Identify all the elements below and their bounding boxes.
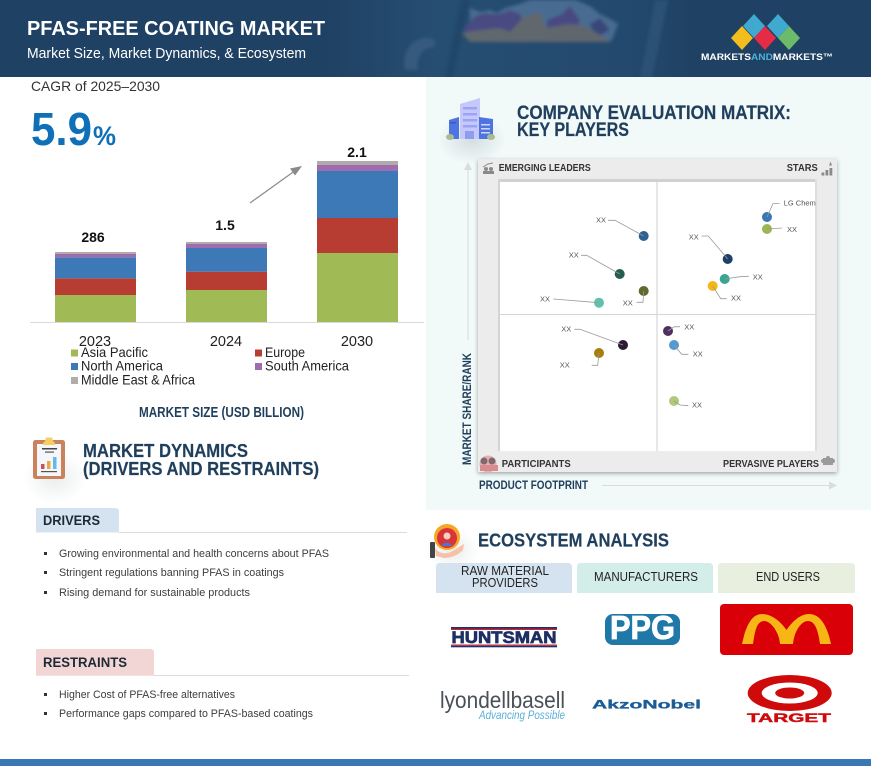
marker: olive green: [762, 224, 797, 234]
CAGR label: CAGR of 2025–2030: [31, 78, 160, 94]
marker: near black: [561, 325, 628, 350]
y axis arrow: [464, 162, 472, 340]
icon: clipboard: [23, 438, 87, 504]
subtitle: Market Size, Market Dynamics, & Ecosystem: [27, 46, 306, 62]
marker: purple: XX: [684, 323, 694, 332]
value labels: 1.5: [215, 217, 235, 233]
column header: end users: END USERS: [756, 570, 820, 584]
icon: emerging leaders: [483, 163, 494, 174]
legend: Asia Pacific: [81, 344, 148, 360]
x axis label: PRODUCT FOOTPRINT: [479, 480, 588, 492]
logo: MarketsandMarkets: MARKETS ANDMARKETS™: [701, 52, 833, 63]
heading: MARKET DYNAMICS: [83, 440, 248, 461]
icon: pervasive players: [821, 456, 835, 465]
column header: end users: [718, 563, 855, 593]
year labels: 2024: [210, 334, 242, 350]
heading: ECOSYSTEM ANALYSIS: [478, 530, 669, 550]
panel: evaluation matrix background: [426, 77, 871, 510]
drivers list: [44, 548, 329, 599]
marker: teal: XX: [753, 273, 763, 282]
legend: North America: [81, 358, 163, 374]
restraints list: Higher Cost of PFAS-free alternatives: [59, 689, 235, 701]
restraints list: [44, 689, 313, 720]
logo: LyondellBasell: [440, 687, 565, 722]
column header: raw material providers: PROVIDERS: [472, 576, 538, 590]
icon: hand holding person: [424, 524, 480, 572]
column header: manufacturers: MANUFACTURERS: [594, 570, 698, 584]
axis caption: MARKET SIZE (USD BILLION): [139, 405, 304, 421]
x axis arrow: [602, 482, 837, 490]
icon: participants: [480, 456, 498, 472]
marker: light blue: [669, 340, 703, 359]
quadrant labels: PARTICIPANTS: [502, 458, 571, 470]
icon: buildings: [438, 98, 506, 164]
heading: company evaluation matrix: COMPANY EVALUATION MATRIX:: [517, 103, 791, 124]
drivers tab: DRIVERS: [43, 513, 100, 528]
company markers: [540, 199, 816, 410]
legend: Europe: [265, 344, 305, 360]
legend: South America: [265, 358, 349, 374]
bar chart: market size: [30, 144, 424, 421]
marker: yellow: XX: [731, 294, 741, 303]
column header: raw material providers: RAW MATERIAL: [461, 564, 549, 578]
logo: AkzoNobel: AkzoNobel: [592, 698, 701, 712]
legend: Middle East & Africa: [81, 372, 195, 388]
marker: olive green: XX: [787, 225, 797, 234]
marker: dark teal: XX: [569, 251, 579, 260]
chart: company evaluation matrix: [460, 159, 837, 492]
header banner: [0, 0, 871, 78]
title: PFAS-FREE COATING MARKET: [27, 18, 325, 40]
year labels: [79, 334, 373, 350]
legend: [71, 344, 349, 388]
marker: LG Chem: LG Chem: [784, 199, 816, 208]
quadrant labels: PERVASIVE PLAYERS: [723, 458, 819, 470]
logo: Target: [747, 675, 832, 725]
quadrant labels: EMERGING LEADERS: [499, 162, 591, 174]
marker: mint: [540, 295, 604, 308]
CAGR value: %: [93, 121, 116, 151]
marker: blue: [596, 216, 649, 241]
icon: stars: [822, 162, 832, 176]
bar 2024: [186, 242, 267, 322]
marker: LG Chem: [762, 199, 816, 222]
marker: dark olive: [623, 286, 649, 308]
footer bar: [0, 759, 871, 766]
logo: LyondellBasell: Advancing Possible: [478, 708, 565, 722]
bar 2023: [55, 252, 136, 322]
panel: market dynamics: [23, 438, 409, 720]
heading: (DRIVERS AND RESTRAINTS): [83, 458, 319, 479]
matrix plot area: [498, 179, 817, 451]
marker: brown: XX: [560, 361, 570, 370]
drivers list: Stringent regulations banning PFAS in coatings: [59, 567, 284, 579]
logo: Huntsman: HUNTSMAN: [452, 629, 556, 647]
marker: purple: [663, 323, 694, 336]
marker: navy: XX: [689, 233, 699, 242]
logo: PPG: PPG: [610, 609, 675, 646]
value labels: 2.1: [347, 144, 367, 160]
CAGR value: 5.9: [31, 103, 92, 155]
drivers list: Rising demand for sustainable products: [59, 587, 250, 599]
logo: MarketsandMarkets: [701, 14, 833, 63]
year labels: 2030: [341, 334, 373, 350]
drivers list: Growing environmental and health concerns about PFAS: [59, 548, 329, 560]
marker: lime: XX: [692, 401, 702, 410]
value labels: 286: [81, 229, 105, 245]
column header: manufacturers: [577, 563, 713, 593]
y axis label: MARKET SHARE/RANK: [460, 353, 474, 465]
growth arrow: [250, 166, 302, 203]
marker: navy: [689, 233, 733, 264]
marker: blue: XX: [596, 216, 606, 225]
year labels: 2023: [79, 334, 111, 350]
marker: mint: XX: [540, 295, 550, 304]
column header: raw material providers: [436, 563, 572, 593]
bar 2030: [317, 161, 398, 322]
marker: yellow: [708, 281, 741, 303]
quadrant labels: [499, 162, 819, 470]
marker: dark teal: [569, 251, 625, 279]
logo: McDonald's: [720, 604, 853, 655]
heading: company evaluation matrix: [517, 103, 791, 141]
restraints tab: RESTRAINTS: [43, 655, 127, 670]
marker: light blue: XX: [693, 350, 703, 359]
heading: company evaluation matrix: KEY PLAYERS: [517, 120, 629, 141]
marker: teal: [720, 273, 763, 284]
restraints tab: [36, 649, 409, 676]
marker: lime: [669, 396, 702, 410]
restraints list: Performance gaps compared to PFAS-based coatings: [59, 708, 313, 720]
marker: dark olive: XX: [623, 299, 633, 308]
drivers tab: [36, 508, 407, 532]
matrix frame: [478, 159, 837, 472]
marker: near black: XX: [561, 325, 571, 334]
marker: brown: [560, 348, 604, 370]
logo: Target: TARGET: [747, 713, 831, 725]
logo: LyondellBasell: lyondellbasell: [440, 687, 565, 713]
value labels: [81, 144, 367, 245]
heading: [83, 440, 319, 479]
panel: ecosystem analysis: [424, 524, 855, 725]
quadrant labels: STARS: [787, 162, 818, 174]
